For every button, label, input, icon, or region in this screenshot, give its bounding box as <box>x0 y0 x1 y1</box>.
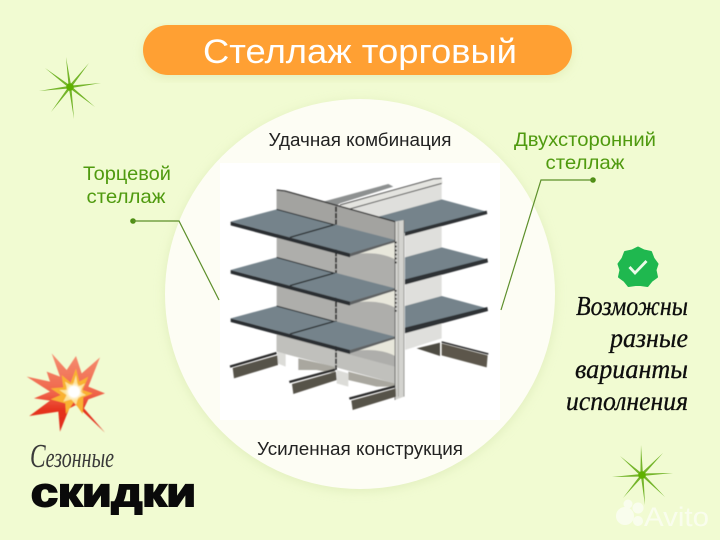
panel upper dark <box>277 190 395 241</box>
uprights at feet <box>277 352 286 367</box>
callout: double-sided rack: стеллаж <box>546 152 624 174</box>
right foot <box>417 342 488 367</box>
icon: green star top left <box>39 57 101 119</box>
label: top: Удачная комбинация <box>268 129 452 150</box>
shelf seams <box>277 209 335 322</box>
icon: green check badge <box>618 248 658 286</box>
front column <box>395 220 404 400</box>
right unit back wall <box>348 180 442 350</box>
title pill <box>143 25 572 78</box>
text: variants note: разные <box>608 323 688 353</box>
callout: double-sided rack <box>501 129 656 310</box>
watermark: Avito <box>616 500 709 532</box>
text: variants note: варианты <box>575 354 688 384</box>
callout: double-sided rack: Двухсторонний <box>514 129 656 151</box>
icon: green star bottom right <box>612 445 673 505</box>
right shelves <box>378 199 488 333</box>
centre divider <box>333 207 338 370</box>
title pill: Стеллаж торговый <box>203 33 517 71</box>
text: discounts: скидки <box>31 471 196 515</box>
watermark: Avito: Avito <box>644 502 709 532</box>
callout: end rack: стеллаж <box>86 186 166 208</box>
left shelves <box>231 209 395 354</box>
top rail <box>323 178 443 209</box>
callout: end rack <box>83 163 219 300</box>
text: variants note <box>566 291 688 416</box>
photo backdrop <box>220 163 500 420</box>
left feet <box>230 353 396 410</box>
central circle <box>164 99 556 492</box>
callout: end rack: Торцевой <box>83 163 171 185</box>
label: bottom: Усиленная конструкция <box>257 438 463 459</box>
wall top edge <box>277 190 395 222</box>
left wall <box>277 190 395 383</box>
shelving illustration <box>230 178 488 410</box>
text: variants note: Возможны <box>576 291 688 321</box>
under legs back <box>298 358 335 373</box>
icon: explosion <box>27 353 105 433</box>
text: variants note: исполнения <box>566 386 688 416</box>
text: seasonal: Сезонные <box>30 438 114 475</box>
curved highlights <box>350 243 395 356</box>
